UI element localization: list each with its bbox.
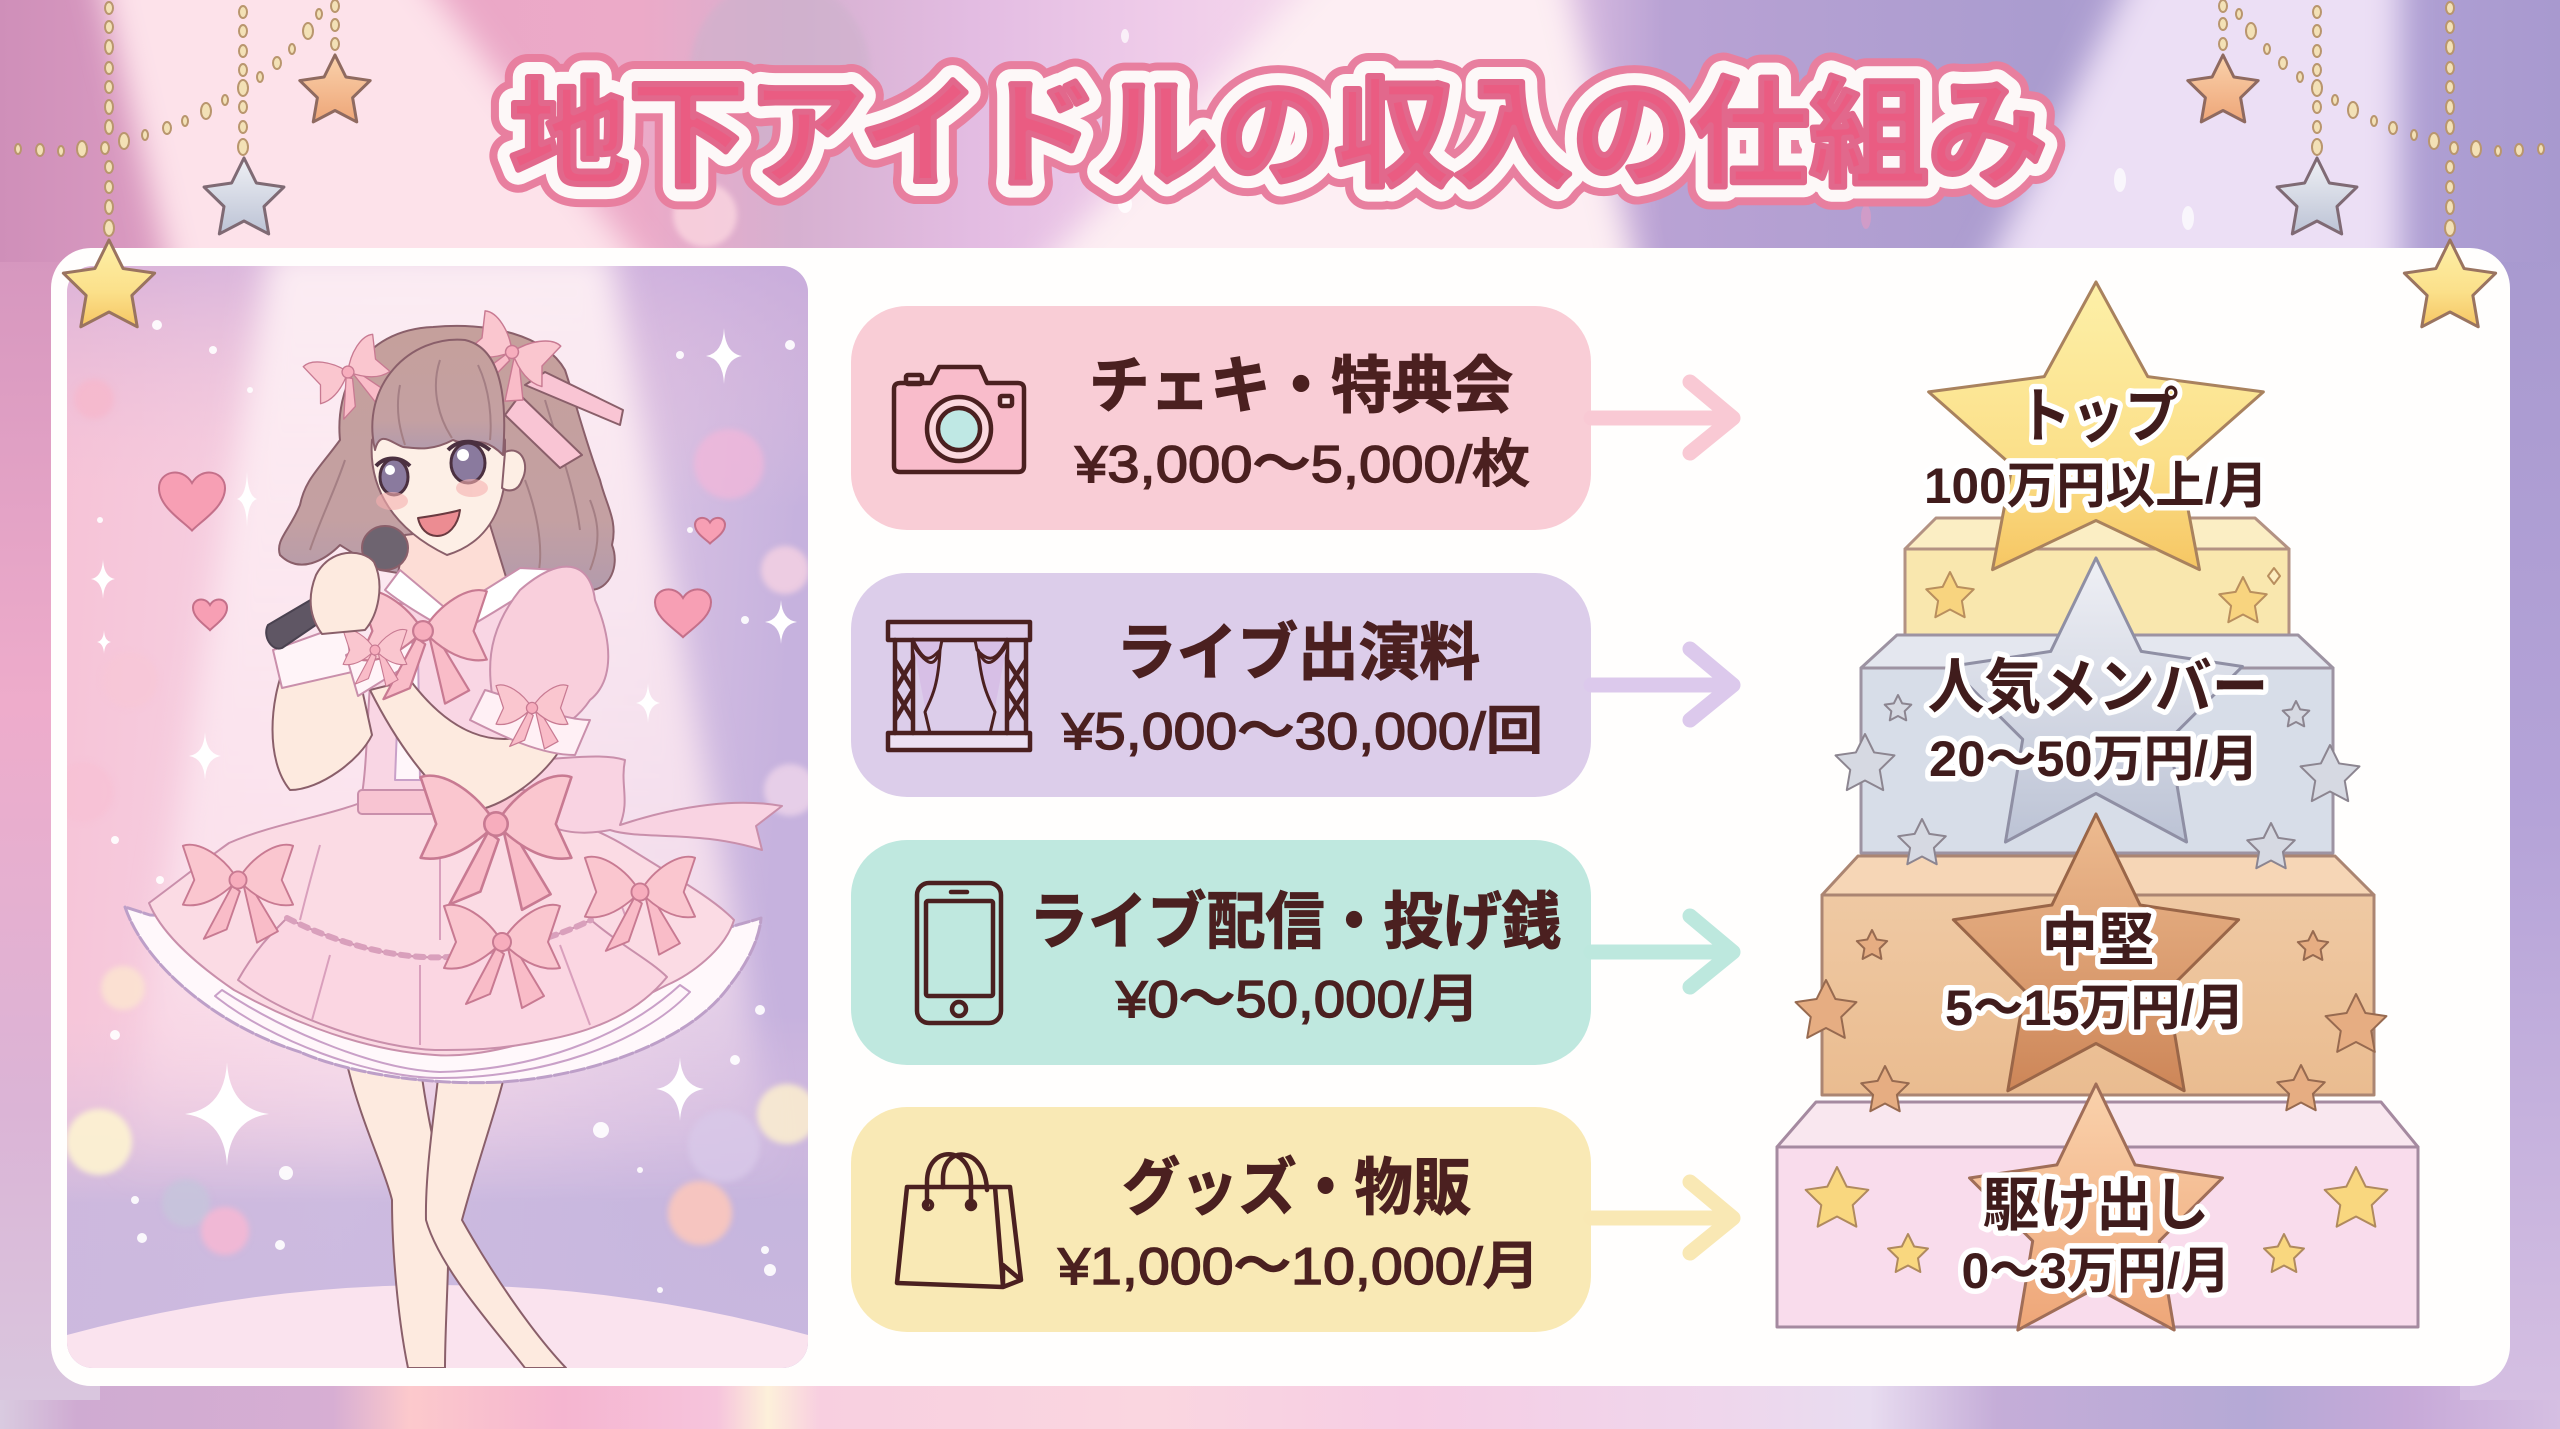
value: ¥3,000〜5,000/枚 <box>1074 436 1530 494</box>
tier label: top: 100万円以上/月 <box>1924 458 2268 514</box>
side stars: popular <box>1836 695 2359 868</box>
hand <box>311 553 379 634</box>
tier label: mid <box>1945 908 2245 1036</box>
title: 地下アイドルの収入の仕組み <box>510 70 2047 202</box>
arrow: goods <box>1591 1182 1733 1253</box>
mouth <box>418 510 460 536</box>
icon: gold star <box>2404 240 2496 327</box>
sparkle dots <box>97 320 795 1293</box>
skirt <box>149 803 734 1055</box>
panel: income source live fee <box>851 573 1591 797</box>
tier label: top: トップ <box>2018 383 2178 450</box>
icon: silver star <box>204 158 284 234</box>
heading: ライブ出演料 <box>1116 619 1480 688</box>
main white panel <box>51 248 2510 1386</box>
panel: income source goods <box>851 1107 1591 1332</box>
tier label: popular: 人気メンバー <box>1928 654 2268 721</box>
icon: silver star <box>2277 158 2357 234</box>
icon: peach star <box>300 55 370 122</box>
arrow: streaming <box>1591 916 1733 987</box>
title: 地下アイドルの収入の仕組み <box>510 70 2047 202</box>
tier star: mid <box>1953 814 2239 1091</box>
side stars: starter <box>1806 1167 2387 1272</box>
hanging stars and bead chains: right <box>2188 0 2544 327</box>
microphone <box>265 599 316 650</box>
ribbon sash <box>520 756 782 850</box>
tier label: mid: 中堅 <box>2042 908 2154 973</box>
eyes <box>376 442 490 495</box>
tier box: popular <box>1861 635 2333 853</box>
bows <box>421 776 571 910</box>
under frill <box>125 907 761 1083</box>
arms <box>272 660 372 790</box>
tier box: top <box>1905 518 2289 635</box>
tier label: starter <box>1962 1173 2230 1299</box>
puff sleeve <box>490 567 608 734</box>
icon: orange star <box>2188 55 2258 122</box>
value: ¥5,000〜30,000/回 <box>1061 703 1543 761</box>
blush <box>376 479 488 510</box>
tier star: starter <box>1970 1084 2222 1330</box>
spotlight beam <box>151 266 758 1114</box>
sparkles <box>91 328 797 1166</box>
panel: income source cheki <box>851 306 1591 530</box>
icon: smartphone <box>917 883 1001 1023</box>
arrow: cheki <box>1591 382 1733 453</box>
idol figure <box>125 310 782 1368</box>
panel: income source streaming <box>851 840 1591 1065</box>
hanging stars and bead chains: left <box>15 0 370 327</box>
heading: チェキ・特典会 <box>1089 352 1513 421</box>
value: ¥0〜50,000/月 <box>1115 971 1480 1029</box>
back hair <box>279 326 615 602</box>
arrow: live fee <box>1591 649 1733 720</box>
hair ribbon tails <box>505 372 623 468</box>
tier box: starter <box>1777 1102 2418 1327</box>
tier label: starter: 駆け出し <box>1982 1173 2210 1238</box>
tier label: popular <box>1928 654 2268 787</box>
stage floor <box>67 1285 808 1368</box>
neck <box>397 524 506 605</box>
cuffs <box>272 632 350 689</box>
heading: グッズ・物販 <box>1122 1154 1471 1223</box>
tier label: top <box>1924 383 2268 514</box>
heading: ライブ配信・投げ銭 <box>1029 888 1561 957</box>
icon: gold star <box>63 240 155 327</box>
tier box: mid <box>1822 856 2374 1095</box>
icon: camera <box>894 367 1024 472</box>
tier star: popular <box>1950 558 2242 842</box>
bodice <box>360 567 559 805</box>
tier label: popular: 20〜50万円/月 <box>1929 731 2259 787</box>
tier label: mid: 5〜15万円/月 <box>1945 980 2245 1036</box>
value: ¥1,000〜10,000/月 <box>1057 1238 1540 1296</box>
legs <box>346 1060 566 1368</box>
chart: income pyramid <box>1777 282 2418 1330</box>
hearts <box>159 473 725 637</box>
tier label: starter: 0〜3万円/月 <box>1962 1243 2230 1299</box>
title: 地下アイドルの収入の仕組み <box>510 70 2047 202</box>
bangs <box>372 340 504 455</box>
icon: shopping bag <box>897 1154 1021 1287</box>
face <box>370 438 506 556</box>
side stars: mid <box>1796 930 2386 1111</box>
tier star: top <box>1929 282 2263 570</box>
bokeh lights <box>54 379 817 1255</box>
icon: stage curtain <box>888 622 1030 750</box>
panel: idol illustration <box>54 250 817 1368</box>
